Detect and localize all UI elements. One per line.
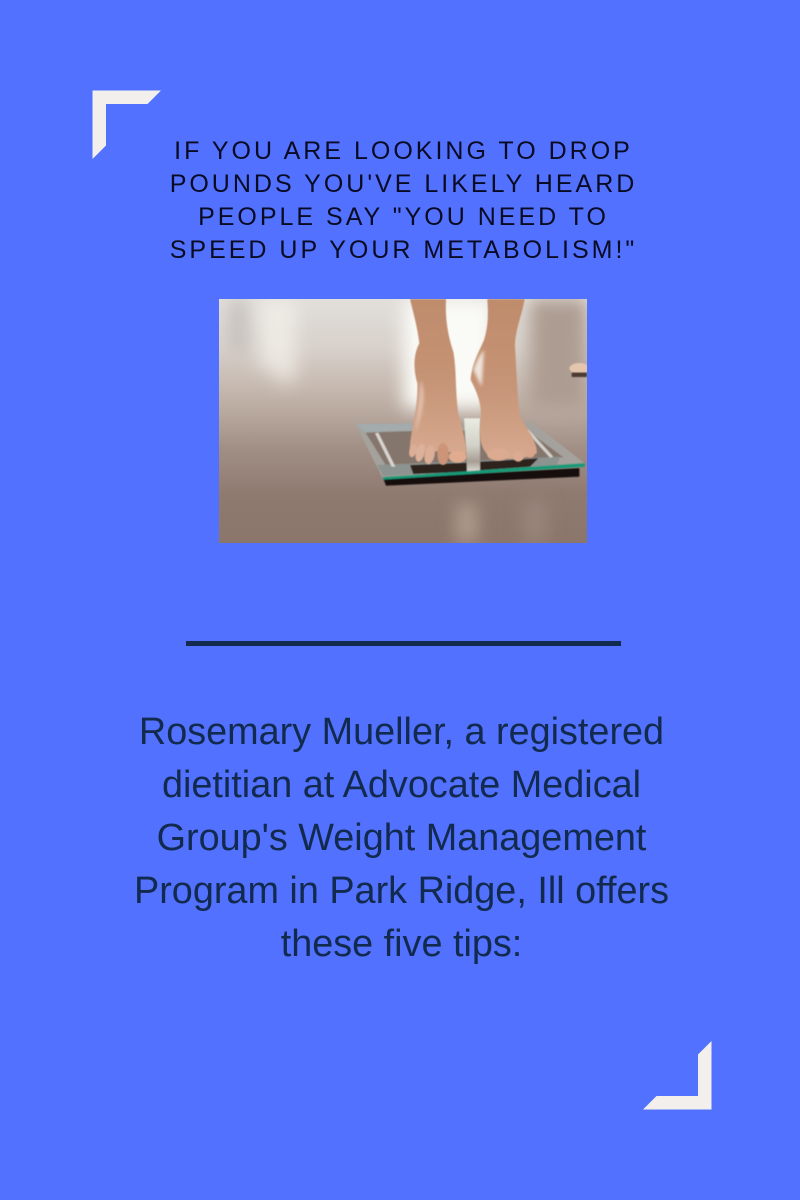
photo: bare feet stepping on a glass scale — [219, 299, 587, 543]
body text: Group's Weight Management — [157, 817, 646, 859]
body text: Program in Park Ridge, Ill offers — [134, 870, 669, 912]
heading: IF YOU ARE LOOKING TO DROP — [174, 137, 633, 165]
corner bracket: bottom right — [643, 1041, 712, 1110]
scale — [355, 418, 585, 486]
left leg and foot — [408, 299, 467, 465]
body text — [134, 711, 669, 965]
heading: SPEED UP YOUR METABOLISM!" — [170, 236, 637, 264]
floor — [219, 299, 587, 543]
heading: PEOPLE SAY "YOU NEED TO — [198, 203, 609, 231]
body text: dietitian at Advocate Medical — [162, 764, 641, 806]
object at right edge — [569, 363, 589, 377]
heading — [170, 137, 637, 264]
heading: POUNDS YOU'VE LIKELY HEARD — [170, 170, 637, 198]
right leg and foot — [471, 299, 537, 462]
divider line — [186, 641, 621, 646]
body text: these five tips: — [281, 923, 522, 965]
body text: Rosemary Mueller, a registered — [139, 711, 664, 753]
corner bracket: top left — [92, 90, 161, 159]
